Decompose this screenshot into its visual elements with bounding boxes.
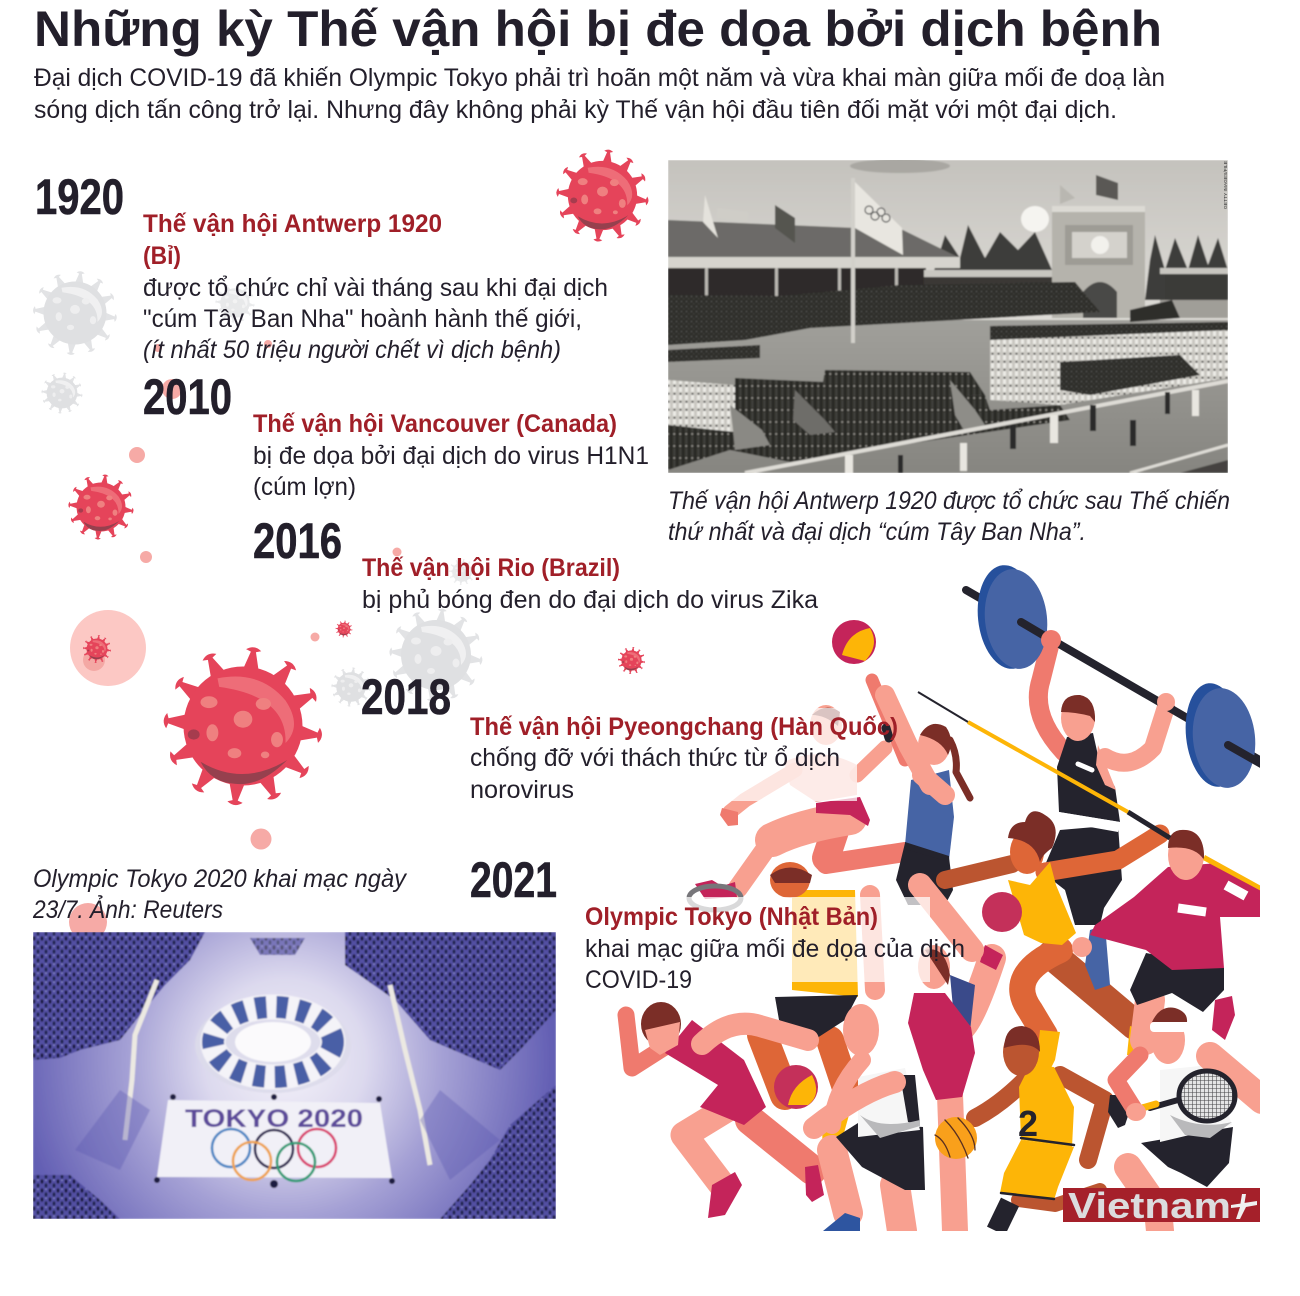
caption: Antwerp photo — [668, 487, 1230, 546]
banner — [157, 1100, 392, 1181]
athlete: man in yellow top — [689, 862, 875, 1147]
photo: Tokyo 2020 opening ceremony — [33, 932, 556, 1219]
athlete: pink ball — [982, 892, 1022, 932]
athlete: volleyball player — [872, 680, 970, 905]
athlete: tennis player — [1108, 1008, 1262, 1231]
caption: Tokyo photo: Olympic Tokyo 2020 khai mạc ngày — [33, 865, 407, 893]
entry: 2021: khai mạc giữa mối đe dọa của dịch — [585, 935, 965, 963]
caption: Tokyo photo — [32, 865, 407, 924]
intro text: sóng dịch tấn công trở lại. Nhưng đây không phải kỳ Thế vận hội đầu tiên đối mặt với một đại dịch. — [34, 96, 1117, 124]
entry: 2021: COVID-19 — [585, 966, 692, 994]
athlete: hurdler — [695, 705, 905, 899]
entry: 1920: 1920 — [35, 169, 124, 225]
entry: 2010: Thế vận hội Vancouver (Canada) — [253, 410, 617, 438]
entry: 2016: 2016 — [253, 513, 342, 569]
gray virus group — [33, 271, 483, 707]
athlete: bald man in white — [814, 1004, 925, 1231]
entry: 1920: Thế vận hội Antwerp 1920 — [143, 210, 442, 238]
entry: 2016: bị phủ bóng đen do đại dịch do virus Zika — [362, 586, 818, 614]
caption: Antwerp photo: Thế vận hội Antwerp 1920 được tổ chức sau Thế chiến — [668, 487, 1230, 515]
entry: 2010: 2010 — [143, 369, 232, 425]
athlete: man in red sweater — [1072, 830, 1263, 1040]
entry: 1920: (Bỉ) — [143, 242, 181, 270]
entry: 2010 — [143, 369, 649, 501]
entry: 2018: Thế vận hội Pyeongchang (Hàn Quốc) — [470, 713, 898, 741]
banner: TOKYO 2020 — [185, 1105, 363, 1133]
entry: 1920 — [35, 169, 608, 364]
entry: 2021 — [470, 852, 965, 994]
athlete: javelin — [918, 692, 1170, 838]
entry: 2021: Olympic Tokyo (Nhật Bản) — [585, 903, 878, 931]
athlete: weightlifter — [966, 562, 1263, 925]
entry: 2018: chống đỡ với thách thức từ ổ dịch — [470, 744, 840, 772]
caption: Antwerp photo: thứ nhất và đại dịch “cúm Tây Ban Nha”. — [668, 518, 1086, 546]
logo: Vietnam+: Vietnam — [1068, 1185, 1231, 1226]
entry: 2018 — [361, 669, 898, 804]
athlete: sprinter woman — [945, 811, 1160, 1080]
entry: 2016: Thế vận hội Rio (Brazil) — [362, 554, 620, 582]
translucent panel over hurdler — [470, 708, 857, 801]
intro text — [34, 64, 1165, 124]
entry: 2010: (cúm lợn) — [253, 473, 356, 501]
athlete: red and yellow ball — [774, 1065, 818, 1109]
red virus group — [68, 149, 649, 806]
entry: 2018: norovirus — [470, 776, 574, 804]
pink droplets — [69, 340, 402, 941]
athlete: cheerleader — [908, 885, 1003, 1231]
athlete: runner in red vest — [626, 1002, 824, 1218]
athlete: basketball player — [935, 1026, 1105, 1231]
entry: 1920: (ít nhất 50 triệu người chết vì dịch bệnh) — [143, 336, 561, 364]
translucent panel over athletes — [585, 897, 930, 982]
caption: Tokyo photo: 23/7. Ảnh: Reuters — [32, 893, 223, 924]
entry: 2021: 2021 — [470, 852, 557, 908]
entry: 2016 — [253, 513, 818, 614]
credit text: GETTY IMAGES/FILE — [1223, 161, 1229, 209]
entry: 1920: "cúm Tây Ban Nha" hoành hành thế giới, — [143, 305, 582, 333]
virus in pink cell — [70, 610, 146, 686]
photo: Antwerp 1920 stadium — [668, 159, 1229, 473]
entry: 1920: được tổ chức chỉ vài tháng sau khi đại dịch — [143, 274, 608, 302]
entry: 2018: 2018 — [361, 669, 451, 725]
athletes illustration — [626, 562, 1263, 1231]
athlete: basketball player: 2 — [1018, 1103, 1038, 1144]
title: Những kỳ Thế vận hội bị đe dọa bởi dịch bệnh — [34, 1, 1162, 57]
athlete: volleyball ball — [832, 620, 876, 664]
entry: 2010: bị đe dọa bởi đại dịch do virus H1N1 — [253, 442, 649, 470]
intro text: Đại dịch COVID-19 đã khiến Olympic Tokyo phải trì hoãn một năm và vừa khai màn giữa mối đe doạ làn — [34, 64, 1165, 92]
